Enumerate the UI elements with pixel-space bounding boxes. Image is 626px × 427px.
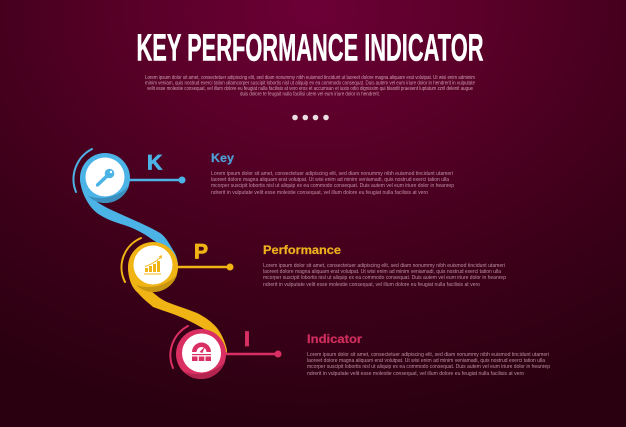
P letter: P: [194, 240, 208, 264]
K connector curve: [80, 178, 178, 268]
I pointer line: [224, 353, 278, 355]
K outer arc: [74, 149, 92, 192]
P body text: mcorper suscipit lobortis nisl ut aliquip ex ea commodo consequat. Duis autem vel eum iriure dolor in heanrep: [263, 275, 506, 281]
intro text block: minim veniam, quis nostrud exerci tation ullamcorper suscipit lobortis nisl ut aliquip ex ea commodo consequat. Duis autem vel eum iriure dolor in hendrerit in vulputate: [145, 80, 475, 86]
I body text: mcorper suscipit lobortis nisl ut aliquip ex ea commodo consequat. Duis autem vel eum iriure dolor in heanrep: [307, 364, 550, 370]
pagination dots: [292, 115, 329, 120]
K body text: mcorper suscipit lobortis nisl ut aliquip ex ea commodo consequat. Duis autem vel eum iriure dolor in heanrep: [211, 183, 454, 189]
P connector curve: [128, 267, 227, 356]
K body text: laoreet dolore magna aliquam erat volutpat. Ut wisi enim ad minim veniamadi, quis nostrud exerci tation ulla: [211, 177, 449, 183]
K body text: Lorem ipsum dolor sit amet, consectetuer adipiscing elit, sed diam nonummy nibh euismod tincidunt utameri: [211, 171, 453, 177]
P body text: ndrerit in vulputate velit esse molestie consequat, vel illum dolore eu feugiat nulla facilisis at vero: [263, 282, 480, 288]
K body text: ndrerit in vulputate velit esse molestie consequat, vel illum dolore eu feugiat nulla facilisis at vero: [211, 190, 428, 196]
icon: gauge: [192, 342, 211, 361]
K pointer line: [128, 179, 182, 181]
icon: growth chart: [144, 255, 162, 274]
step K: key: [74, 149, 454, 268]
P heading: Performance: [263, 245, 341, 257]
step P: performance: [122, 238, 506, 356]
I body text: ndrerit in vulputate velit esse molestie consequat, vel illum dolore eu feugiat nulla facilisis at vero: [307, 371, 524, 377]
K body text: [211, 171, 454, 196]
I heading: Indicator: [307, 334, 363, 346]
K heading: Key: [211, 153, 235, 165]
intro text block: duis dolore te feugait nulla facilisi utem vel eum iriure dolor in hendrerit.: [240, 92, 380, 98]
I body text: laoreet dolore magna aliquam erat volutpat. Ut wisi enim ad minim veniamadi, quis nostrud exerci tation ulla: [307, 358, 545, 364]
P pointer line: [175, 266, 230, 268]
K circle: [80, 153, 130, 203]
intro text block: Lorem ipsum dolor sit amet, consectetuer adipiscing elit, sed diam nonummy nibh euismod tincidunt ut laoreet dolore magna aliquam erat volutpat. Ut wisi enim adminim: [145, 75, 475, 81]
I outer arc: [170, 326, 188, 368]
P outer arc: [122, 238, 141, 282]
I body text: Lorem ipsum dolor sit amet, consectetuer adipiscing elit, sed diam nonummy nibh euismod tincidunt utameri: [307, 352, 549, 358]
I circle: [176, 329, 226, 379]
icon: key: [96, 169, 114, 186]
intro text block: velit esse molestie consequat, vel illum dolore eu feugiat nulla facilisis at vero eros et accumsan et iusto odio dignissim qui blandit praesent luptatum zzril delenit augue: [147, 86, 473, 92]
P body text: laoreet dolore magna aliquam erat volutpat. Ut wisi enim ad minim veniamadi, quis nostrud exerci tation ulla: [263, 269, 501, 275]
I letter: I: [244, 328, 250, 351]
step I: indicator: [170, 326, 550, 379]
P circle: [128, 242, 178, 292]
P body text: [263, 263, 506, 288]
I body text: [307, 352, 550, 377]
K letter: K: [147, 152, 162, 174]
intro text block: [145, 75, 475, 98]
P body text: Lorem ipsum dolor sit amet, consectetuer adipiscing elit, sed diam nonummy nibh euismod tincidunt utameri: [263, 263, 505, 269]
